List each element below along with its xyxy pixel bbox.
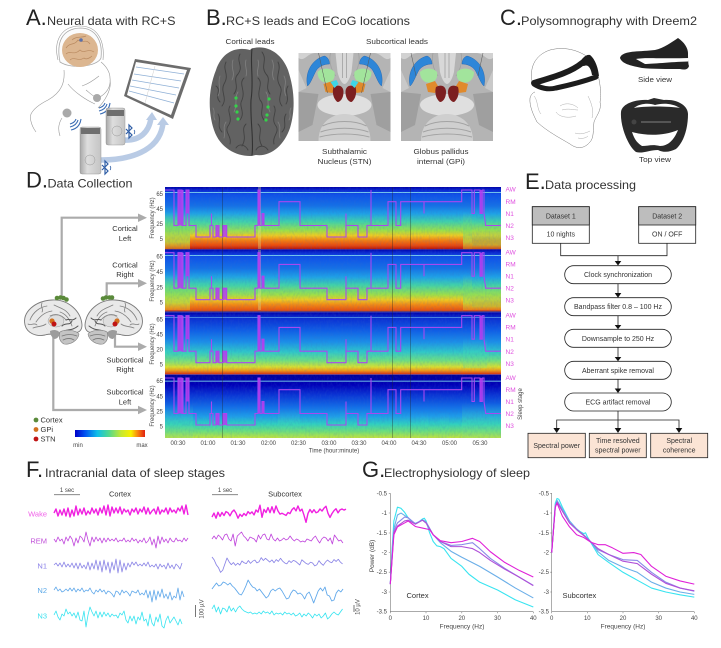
sleep stage row labels: N1 bbox=[37, 562, 47, 570]
MRI slice with GPi leads bbox=[401, 53, 493, 141]
sleep stage traces bbox=[165, 190, 501, 425]
illustration: head with Dreem2 headband bbox=[530, 49, 601, 148]
heading B: RC+S leads and ECoG locations bbox=[226, 14, 410, 28]
frequency axis labels: 5 bbox=[160, 237, 164, 243]
heading B bbox=[206, 5, 410, 30]
frequency axis labels: 65 bbox=[156, 379, 164, 385]
frequency axis labels: 65 bbox=[156, 192, 164, 198]
label: subcortical right bbox=[106, 356, 144, 374]
time axis: 01:30 bbox=[230, 441, 246, 447]
power spectrum chart: cortex: 40 bbox=[530, 616, 537, 622]
power spectrum chart: subcortex: Subcortex bbox=[562, 591, 597, 600]
cortical brain top view with leads bbox=[210, 47, 294, 156]
label: STN: Subthalamic bbox=[322, 147, 367, 156]
frequency axis labels: 5 bbox=[160, 362, 164, 368]
label: cortical left: Left bbox=[119, 234, 132, 243]
colour scale: max bbox=[136, 443, 148, 449]
label: subcortical left: Subcortical bbox=[106, 388, 144, 396]
time axis bbox=[170, 441, 488, 454]
sleep stage labels: N1 bbox=[506, 336, 514, 344]
heading C bbox=[500, 5, 697, 30]
label: cortical leads: Cortical leads bbox=[226, 37, 275, 46]
label: subcortical left bbox=[106, 388, 144, 406]
power spectrum chart: subcortex: 20 bbox=[620, 616, 627, 622]
power spectrum chart: cortex: -2.5 bbox=[377, 570, 388, 576]
RC+S device lower bbox=[80, 127, 101, 174]
scale and title: subcortex traces: Subcortex bbox=[268, 490, 302, 498]
time axis: 00:30 bbox=[170, 441, 186, 447]
sleep stage labels: RM bbox=[506, 387, 516, 394]
wireless signal icons bbox=[70, 103, 110, 130]
output: time resolved spectral power bbox=[589, 433, 646, 458]
frequency axis labels: 5 bbox=[160, 300, 164, 306]
power spectrum chart: subcortex: -3 bbox=[544, 590, 550, 596]
label: cortical left bbox=[112, 224, 138, 243]
frequency axis labels: 25 bbox=[156, 222, 164, 228]
flowchart: data processing bbox=[528, 207, 708, 458]
heading A: A. bbox=[26, 5, 47, 30]
power spectrum chart: cortex: -1.5 bbox=[377, 531, 388, 537]
sleep stage labels: N3 bbox=[506, 298, 514, 304]
output: spectral coherence bbox=[651, 433, 708, 458]
RC+S device upper bbox=[106, 108, 125, 145]
sleep stage labels: RM bbox=[506, 199, 516, 206]
label: cortical left: Cortical bbox=[112, 224, 138, 233]
frequency axis labels: 5 bbox=[160, 424, 164, 430]
power spectrum chart: cortex: 20 bbox=[458, 616, 466, 622]
tablet bbox=[124, 59, 191, 119]
power spectrum chart: cortex: 30 bbox=[494, 616, 501, 622]
frequency axis labels: 65 bbox=[156, 254, 164, 260]
implant sites bbox=[62, 94, 101, 118]
heading D: Data Collection bbox=[48, 176, 132, 190]
arrow to cortical left bbox=[62, 214, 147, 298]
patient head and shoulders sketch bbox=[30, 26, 110, 136]
heading F: F. bbox=[26, 457, 43, 482]
power spectrum chart: subcortex: -2 bbox=[544, 550, 550, 556]
heading A: Neural data with RC+S bbox=[47, 14, 176, 28]
power spectrum chart: subcortex: -0.5 bbox=[539, 492, 550, 498]
power spectrum chart: cortex: Power (dB) bbox=[369, 540, 376, 572]
dataset 1 box bbox=[532, 207, 589, 243]
frequency axis labels: 45 bbox=[156, 207, 164, 213]
output: spectral coherence: Spectral bbox=[666, 438, 692, 445]
step: clock synchronization bbox=[565, 266, 671, 284]
cortex traces bbox=[54, 505, 188, 628]
power spectrum chart: subcortex: 40 bbox=[691, 616, 698, 622]
label: subcortical leads: Subcortical leads bbox=[366, 37, 428, 46]
step: bandpass filter bbox=[565, 298, 671, 316]
frequency axis labels: 20 bbox=[156, 348, 164, 354]
label: GPi bbox=[414, 147, 469, 166]
power spectrum chart: subcortex: -1.5 bbox=[539, 531, 550, 537]
time axis: 04:30 bbox=[411, 441, 427, 447]
power spectrum chart: subcortex: -1 bbox=[544, 511, 550, 517]
heading C: Polysomnography with Dreem2 bbox=[521, 14, 697, 28]
dataset 2 box: ON / OFF bbox=[652, 232, 682, 238]
label: subcortical right: Right bbox=[116, 365, 135, 374]
frequency axis labels bbox=[150, 192, 164, 430]
spectrogram: cortical left bbox=[165, 187, 501, 249]
spectrogram: cortical right bbox=[165, 249, 501, 312]
output: spectral power bbox=[528, 433, 585, 458]
power spectrum chart: subcortex: Frequency (Hz) bbox=[601, 624, 645, 630]
dataset 2 box: Dataset 2 bbox=[652, 214, 682, 220]
sleep stage labels: RM bbox=[506, 324, 516, 332]
legend: electrode sites: GPi bbox=[40, 425, 53, 434]
sleep stage labels: N2 bbox=[506, 286, 514, 292]
brain in head bbox=[62, 33, 98, 67]
scale bar: 100 µV bbox=[196, 599, 206, 619]
time axis: 02:30 bbox=[291, 441, 307, 447]
power spectrum chart: cortex: Cortex bbox=[406, 591, 429, 600]
heading F: Intracranial data of sleep stages bbox=[45, 466, 225, 480]
scale and title: cortex traces bbox=[54, 488, 131, 498]
heading A bbox=[26, 5, 176, 30]
output: time resolved spectral power: Time resolved bbox=[596, 438, 640, 445]
arrow to subcortical left bbox=[53, 334, 147, 414]
scale and title: subcortex traces bbox=[212, 488, 302, 498]
power spectrum chart: cortex: -1 bbox=[382, 511, 388, 517]
sleep stage labels: N1 bbox=[506, 274, 514, 280]
sleep stage labels: AW bbox=[506, 312, 517, 320]
step: spike removal: Aberrant spike removal bbox=[582, 368, 654, 375]
spectrogram: subcortical left bbox=[165, 374, 501, 438]
left hemisphere with electrodes bbox=[25, 295, 82, 344]
power spectrum chart: cortex: -3.5 bbox=[377, 610, 388, 616]
right hemisphere with electrodes bbox=[85, 295, 142, 344]
sleep stage labels bbox=[506, 186, 524, 430]
label: cortical right: Cortical bbox=[112, 260, 138, 270]
arrow to cortical right bbox=[107, 279, 147, 296]
colour scale: min bbox=[73, 443, 83, 449]
colour scale bbox=[73, 430, 148, 449]
heading G bbox=[362, 457, 530, 482]
illustration: patient with RC+S devices and tablet bbox=[30, 26, 191, 174]
Dreem2 side view bbox=[620, 38, 689, 70]
frequency axis labels: 45 bbox=[156, 332, 164, 338]
power spectrum chart: cortex: -3 bbox=[382, 590, 388, 596]
frequency axis labels: 25 bbox=[156, 286, 164, 292]
frequency axis labels: Frequency (Hz) bbox=[150, 260, 156, 302]
frequency axis labels: 45 bbox=[156, 270, 164, 276]
sleep stage labels: N3 bbox=[506, 423, 514, 430]
arrows to tablet bbox=[101, 112, 169, 160]
sleep stage row labels: REM bbox=[30, 536, 47, 546]
frequency axis labels: 25 bbox=[156, 410, 164, 416]
power spectrum chart: cortex: -0.5 bbox=[377, 492, 388, 498]
time axis: 04:00 bbox=[381, 441, 397, 447]
Dreem2 top view bbox=[621, 98, 688, 153]
frequency axis labels: 65 bbox=[156, 318, 164, 324]
step: ECG artifact removal bbox=[565, 393, 671, 411]
power spectrum chart: cortex: 0 bbox=[389, 616, 393, 622]
step: downsample: Downsample to 250 Hz bbox=[582, 336, 655, 343]
frequency axis labels: Frequency (Hz) bbox=[150, 385, 156, 427]
power spectrum chart: subcortex: -2.5 bbox=[539, 570, 550, 576]
label: top view: Top view bbox=[639, 155, 672, 164]
time axis: 01:00 bbox=[200, 441, 216, 447]
step: ECG artifact removal: ECG artifact removal bbox=[586, 400, 651, 406]
arrow to subcortical right bbox=[115, 333, 147, 351]
scale and title: subcortex traces: 1 sec bbox=[218, 488, 232, 494]
ECoG contacts bbox=[234, 96, 271, 122]
sleep stage labels: N3 bbox=[506, 235, 514, 242]
power spectrum chart: cortex bbox=[369, 492, 537, 630]
sleep stage row labels: N2 bbox=[37, 586, 47, 595]
time axis: 03:30 bbox=[351, 441, 367, 447]
label: cortical right: Right bbox=[116, 270, 135, 279]
label: cortical right bbox=[112, 260, 138, 279]
time axis: 05:00 bbox=[442, 441, 458, 447]
power spectrum chart: cortex: 10 bbox=[423, 616, 430, 622]
sleep stage labels: N1 bbox=[506, 399, 514, 406]
legend: electrode sites bbox=[34, 416, 63, 444]
step: spike removal bbox=[565, 361, 671, 379]
output: time resolved spectral power: spectral power bbox=[595, 448, 641, 454]
output: spectral power: Spectral power bbox=[533, 443, 581, 450]
dataset 1 box: Dataset 1 bbox=[546, 214, 576, 220]
frequency axis labels: Frequency (Hz) bbox=[150, 323, 156, 365]
sleep stage labels: N3 bbox=[506, 361, 514, 368]
label: side view: Side view bbox=[638, 75, 673, 84]
heading B: B. bbox=[206, 5, 227, 30]
time axis: 02:00 bbox=[261, 441, 277, 447]
scale and title: cortex traces: Cortex bbox=[109, 490, 131, 498]
sleep stage labels: N1 bbox=[506, 211, 514, 218]
power spectrum chart: subcortex: 30 bbox=[655, 616, 663, 622]
heading G: Electrophysiology of sleep bbox=[384, 466, 530, 480]
heading G: G. bbox=[362, 457, 385, 482]
sleep stage labels: N2 bbox=[506, 411, 514, 418]
power spectrum chart: cortex: -2 bbox=[382, 550, 388, 556]
time axis: 03:00 bbox=[321, 441, 337, 447]
power spectrum chart: subcortex bbox=[539, 492, 698, 630]
heading F bbox=[26, 457, 225, 482]
label: GPi: Globus pallidus bbox=[414, 147, 469, 156]
scale bar: 100 µV: 100 µV bbox=[200, 599, 206, 619]
spectrogram panels with hypnograms bbox=[165, 187, 501, 438]
sleep stage labels: AW bbox=[506, 375, 517, 382]
power spectrum chart: subcortex: 10 bbox=[584, 616, 591, 622]
step: clock synchronization: Clock synchronization bbox=[584, 272, 652, 279]
time axis: 05:30 bbox=[472, 441, 488, 447]
bluetooth icons bbox=[102, 125, 135, 174]
heading C: C. bbox=[500, 5, 522, 30]
MRI slice with STN leads bbox=[298, 53, 390, 141]
power spectrum chart: cortex: Frequency (Hz) bbox=[440, 624, 484, 630]
legend: electrode sites: STN bbox=[40, 434, 56, 444]
heading E bbox=[525, 169, 636, 194]
sleep stage row labels bbox=[28, 510, 47, 620]
legend: electrode sites: Cortex bbox=[40, 416, 63, 424]
dataset 1 box: 10 nights bbox=[547, 232, 575, 238]
dataset 2 box bbox=[639, 207, 696, 243]
subcortex traces bbox=[212, 501, 346, 619]
step: downsample bbox=[565, 329, 671, 347]
label: subcortical right: Subcortical bbox=[106, 356, 144, 364]
heading D: D. bbox=[26, 168, 48, 192]
label: subcortical left: Left bbox=[119, 398, 132, 406]
sleep stage labels: N2 bbox=[506, 223, 514, 230]
sleep stage labels: AW bbox=[506, 250, 517, 256]
sleep stage labels: RM bbox=[506, 262, 516, 268]
sleep stage row labels: N3 bbox=[37, 612, 47, 620]
output: spectral coherence: coherence bbox=[663, 448, 696, 454]
sleep stage labels: Sleep stage bbox=[518, 387, 524, 420]
label: STN: Nucleus (STN) bbox=[318, 157, 372, 166]
spectrogram: subcortical right bbox=[165, 312, 501, 374]
label: GPi: internal (GPi) bbox=[417, 157, 466, 166]
heading E: Data processing bbox=[545, 178, 636, 192]
heading E: E. bbox=[525, 169, 546, 194]
power spectrum chart: subcortex: 0 bbox=[550, 616, 554, 622]
step: bandpass filter: Bandpass filter 0.8 – 100 Hz bbox=[574, 304, 662, 311]
heading D bbox=[26, 168, 132, 192]
frequency axis labels: Frequency (Hz) bbox=[150, 197, 156, 239]
time axis: Time (hour:minute) bbox=[309, 448, 359, 454]
sleep stage labels: N2 bbox=[506, 349, 514, 356]
label: STN bbox=[318, 147, 372, 166]
sleep stage labels: AW bbox=[506, 186, 517, 194]
power spectrum chart: subcortex: -3.5 bbox=[539, 610, 550, 616]
scale bar: 10 µV: 10 µV bbox=[356, 599, 362, 615]
frequency axis labels: 45 bbox=[156, 394, 164, 400]
sleep stage row labels: Wake bbox=[28, 510, 47, 518]
scale and title: cortex traces: 1 sec bbox=[60, 488, 74, 494]
